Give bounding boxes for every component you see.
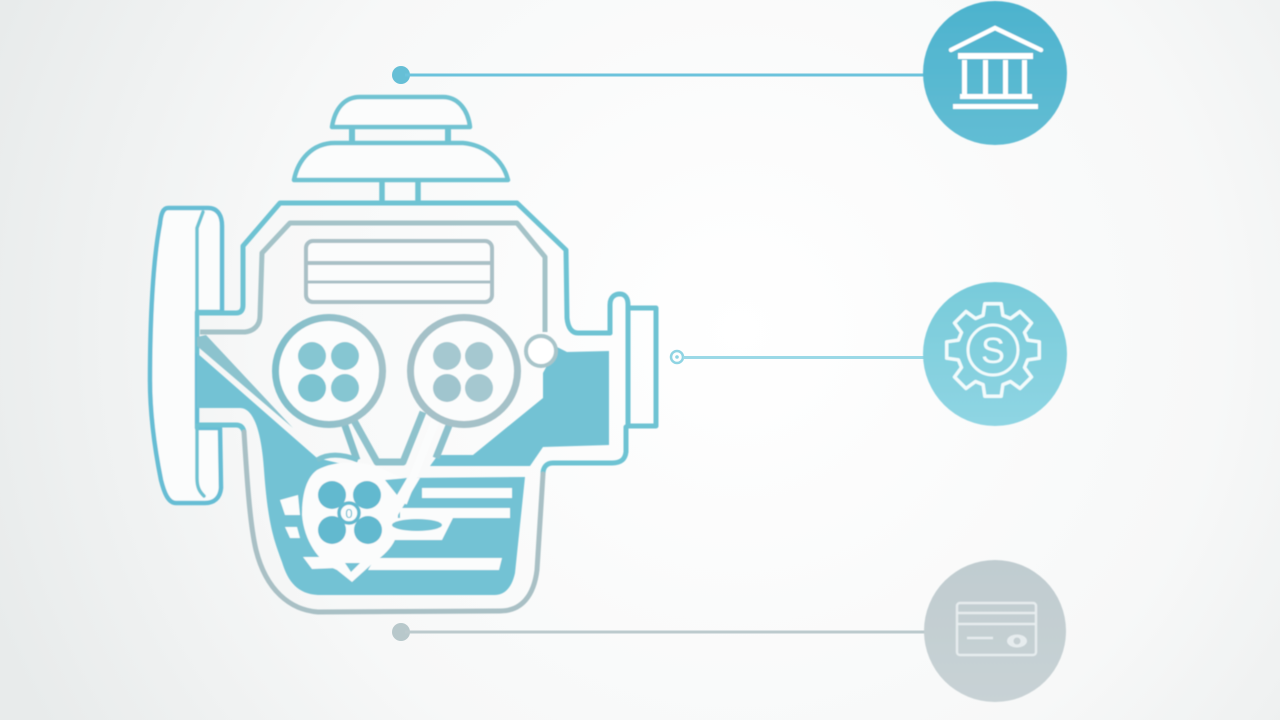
lower teal accents <box>345 478 442 572</box>
engine coolant fill <box>197 347 609 595</box>
right coolant chamber <box>430 347 609 466</box>
outer engine block outline <box>200 203 656 474</box>
icon: gear with dollar <box>923 282 1067 426</box>
lower engine block outline <box>244 432 543 612</box>
lower white details <box>280 462 512 582</box>
inner engine housing outline <box>200 223 545 332</box>
lower crank pulley <box>318 481 382 544</box>
icon: gear with dollar: S <box>981 330 1005 371</box>
air filter lower dome <box>294 143 508 202</box>
left upper wheel <box>276 318 382 424</box>
icon: credit card <box>924 560 1066 702</box>
lower crank pulley: 0 <box>345 506 353 521</box>
right upper wheel <box>410 318 518 424</box>
radiator grille <box>306 241 492 302</box>
connector: middle <box>671 351 925 363</box>
drive belts <box>317 412 450 503</box>
engine illustration <box>150 97 656 612</box>
air filter top cap <box>332 97 470 142</box>
icon: bank <box>923 1 1067 145</box>
lower pulley backing <box>302 462 420 582</box>
connector: top <box>392 66 925 84</box>
white idler pulley <box>526 336 556 366</box>
connector: bottom <box>392 623 925 641</box>
diagonal blade <box>197 335 293 428</box>
flywheel <box>150 208 222 503</box>
lower oil chamber <box>197 353 525 595</box>
